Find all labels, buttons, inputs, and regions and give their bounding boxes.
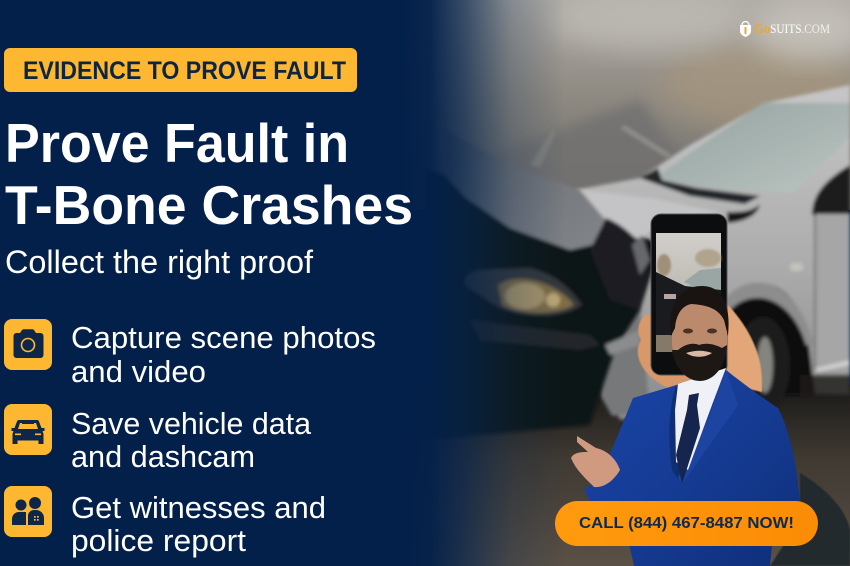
- text: save vehicle data: and dashcam: [71, 439, 255, 474]
- icon: logo lock: [740, 22, 751, 37]
- dark sleeve foreground: [770, 473, 850, 566]
- call to action button: CALL (844) 467-8487 NOW!: [579, 515, 794, 532]
- suit jacket: [584, 370, 800, 566]
- icon: car: [4, 404, 52, 455]
- silver car: [575, 85, 850, 420]
- text: capture scene photos: [71, 320, 376, 389]
- gesturing hand: [571, 436, 620, 487]
- logo wordmark: GoSUITS.COM: [754, 22, 830, 37]
- title: T-Bone Crashes: [5, 174, 413, 236]
- head: [670, 286, 729, 381]
- icon: holding hand: [638, 305, 762, 392]
- text: get witnesses: [71, 490, 326, 558]
- hand and phone: [638, 214, 762, 392]
- phone screen photo: [656, 233, 721, 352]
- icon: smartphone: [651, 214, 727, 375]
- text: get witnesses: police report: [71, 523, 246, 558]
- left navy fade: [400, 0, 565, 566]
- call to action button: [555, 501, 818, 546]
- badge: evidence to prove fault: [4, 48, 357, 92]
- text: get witnesses: Get witnesses and: [71, 490, 326, 525]
- subtitle: Collect the right proof: [5, 244, 313, 280]
- badge: evidence to prove fault: EVIDENCE TO PROVE FAULT: [23, 57, 346, 85]
- list item: witnesses: [4, 486, 326, 558]
- list item: scene photos: [4, 319, 376, 389]
- text: capture scene photos: and video: [71, 354, 206, 389]
- damaged dark car: [425, 130, 720, 440]
- crash scene photo: [400, 0, 850, 566]
- text: save vehicle data: Save vehicle data: [71, 406, 312, 441]
- icon: witnesses: [4, 486, 52, 537]
- logo: GoSuits.com: [740, 22, 830, 37]
- title: Prove Fault in: [5, 112, 349, 174]
- shirt and tie: [675, 368, 726, 484]
- attorney in blue suit: [571, 286, 800, 566]
- text: capture scene photos: Capture scene photos: [71, 320, 376, 355]
- text: save vehicle data: [71, 406, 312, 474]
- icon: camera: [4, 319, 52, 370]
- title: [5, 112, 413, 236]
- list item: vehicle data: [4, 404, 312, 474]
